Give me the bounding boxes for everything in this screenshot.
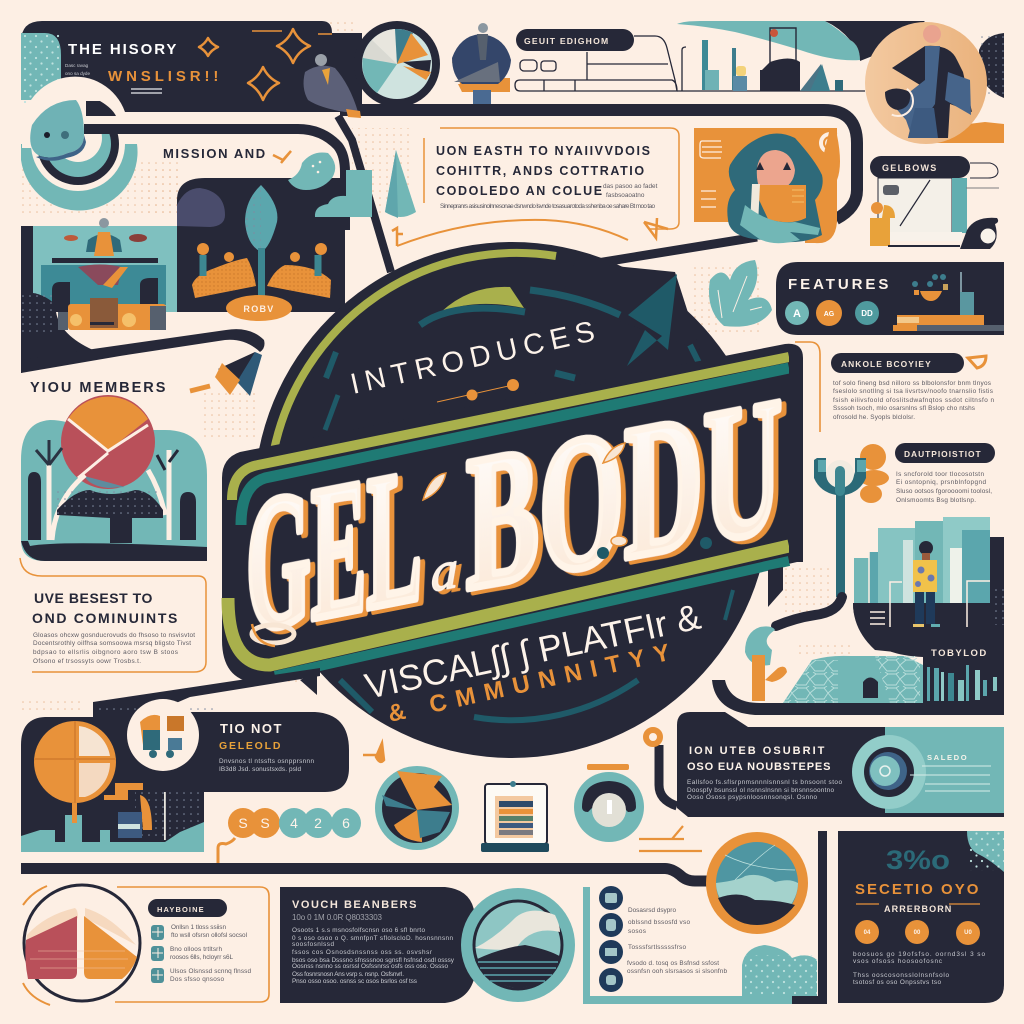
arrow: orange small [363, 743, 384, 762]
label: SALEDO [927, 753, 968, 762]
paragraph: bdpsao to ellsrlis oibgnoro aoro tsw B stoos [33, 649, 178, 656]
panel: city with person [712, 517, 1004, 715]
lines: orange dashes [639, 826, 702, 851]
number badges: 2 [314, 815, 322, 831]
list text: Dosasrsd dsypro [628, 907, 676, 914]
chart: top pie [354, 21, 440, 107]
text block: right paragraph two: Onlsmoomts Bsg blotlsnp. [896, 497, 976, 504]
icon: laptop with bars [481, 781, 549, 852]
connector: orange ring to panel [646, 730, 677, 806]
pill label [148, 899, 227, 917]
paragraph: Ofsono ef trsossyts oowr Trosbs.t. [33, 658, 141, 665]
heading: ION UTEB OSUBRIT [689, 745, 826, 757]
mission heading: MISSION AND [163, 146, 267, 161]
icon: fork post with petals [814, 444, 889, 597]
paragraph: Pnso osso osoo. osnss sc osos bsrlos osf tss [292, 978, 417, 985]
panel: the history [21, 21, 362, 112]
badges [785, 301, 809, 325]
text block: right paragraph two: Is sncforold toor tlocosotstn [896, 471, 984, 478]
paragraph: vsos ofsoss hoosoofosnc [853, 958, 943, 965]
icon: teal plant on orange post [745, 626, 787, 701]
text: community: & CMMUNNITYY [385, 638, 676, 728]
heading accent: wnslisr: WNSLISR!! [108, 68, 220, 85]
list text: Ulsos Olsnssd scnnq flnssd [170, 968, 251, 975]
list text: Dos sfsso qnsoso [170, 976, 224, 983]
panel frame: community list [583, 831, 827, 1004]
list text: Tosssfsrtlsssssfrso [628, 944, 686, 951]
olive arc [274, 253, 556, 450]
skyline bars [927, 665, 997, 701]
dotted texture patches [20, 22, 855, 714]
text: introduces: INTRODUCES [348, 315, 601, 401]
heading: TIO NOT [220, 721, 283, 736]
banner tabs [789, 355, 803, 563]
arrow [968, 356, 986, 368]
chart: red and orange shapes [24, 885, 140, 1001]
dotted dark corner [21, 292, 56, 335]
paragraph: boosuos go 19ofsfso. oornd3sl 3 so [853, 951, 985, 958]
icon: teal leaf [709, 260, 772, 327]
crown shapes [192, 258, 256, 298]
panel: ion uteb [677, 712, 1004, 817]
panel: features: A [793, 308, 801, 320]
swash under G [252, 625, 294, 643]
icon: concentric rings with teal head [21, 77, 144, 211]
panel: vouch beanbers [280, 887, 475, 1003]
panel: mission illustration [177, 178, 345, 321]
text block: right paragraph one: tof solo fineng bsd nilloro ss blbolonsfor bnm tlnyos [833, 380, 991, 387]
heading: SECETIO OYO [855, 881, 980, 898]
headline: CODOLEDO AN COLUE [436, 184, 604, 198]
paragraph: Eallsfoo fs.sflsrpnmsnnnlsnnsnl ts bnsoont stoo [687, 779, 842, 786]
paragraph: IB3d8 Jsd. sonustsxds. psld [219, 766, 301, 773]
decoration: teal blob and cloud [288, 152, 372, 217]
pill label with machine: gelbows: GELBOWS [882, 163, 938, 173]
list text: fvsodo d. tosq os Bsfnsd ssfost [627, 960, 719, 967]
panel: section oyo: 04 [864, 930, 871, 936]
trees [49, 450, 169, 540]
paragraph: 0 s oso osoo o Q. smnfpnT sflolscloD. hosnsnnsnn [292, 935, 453, 942]
icon circle [127, 699, 199, 771]
orange connector: right column [795, 342, 820, 432]
title wordmark [246, 356, 782, 673]
headline: COHITTR, ANDS COTTRATIO [436, 164, 646, 178]
pill label: dauit prosetiot [895, 443, 995, 463]
paragraph: tsotosf os oso Onpsstvs tso [853, 979, 941, 986]
panel: workshop illustration [21, 218, 345, 373]
banner [222, 344, 803, 683]
text block: centre callout: Sinnepranrs asisusinolnnesonae dsnwndo lsvnde tosasuarotoda sshenba oe sahare Bt moo tao [440, 203, 655, 210]
panel: tio not [21, 668, 349, 852]
paragraph: Gloasos ohcxw gosnducrovuds do fhsoso to nsvisvtot [33, 632, 195, 639]
panel: features: AG [824, 311, 835, 318]
tip arrow [560, 262, 700, 350]
buildings [854, 517, 990, 603]
pill label with machine: gelbows [870, 156, 999, 249]
title wordmark: a [431, 538, 458, 604]
text block: centre callout [392, 128, 679, 246]
text block: centre callout: fasbsoaoatno [606, 192, 645, 199]
panel: section oyo: 00 [914, 930, 921, 936]
connector lines: top network [85, 110, 857, 272]
stat: 3%o [886, 845, 950, 875]
small caption: Dasc ravag [65, 63, 88, 68]
subheading: ARRERBORN [884, 904, 952, 914]
panel: features: DD [861, 309, 873, 318]
mini chart [927, 281, 933, 287]
pill label: dauit prosetiot: DAUTPIOISTIOT [904, 449, 982, 459]
headline: UON EASTH TO NYAIIVVDOIS [436, 144, 652, 158]
connector swoosh with lamp [21, 329, 264, 396]
panel: features [776, 262, 1004, 335]
small print: das pasoo ao fadet [603, 183, 658, 190]
swash marks [423, 473, 446, 500]
dark teal arcs [325, 290, 733, 720]
illustration: teal hills and machines [677, 21, 925, 91]
list text: fto wsll ofsrsn ollofsl socsol [171, 932, 247, 939]
figure: seated person [304, 54, 361, 118]
illustration: orange ring landscape [711, 837, 803, 929]
paragraph: Thss ooscosonsslolnsnfsolo [853, 972, 949, 979]
heading: OSO EUA NOUBSTEPES [687, 761, 832, 773]
paragraph: Doospfy bsunssl ol nsnnslnsnn si bnsnnsoontno [687, 787, 834, 794]
icon: teal cone tree [385, 138, 424, 218]
number badges: 6 [342, 815, 350, 831]
heading: UVE BESEST TO [34, 590, 154, 606]
paragraph: Oss fosnrsnosn Ans vsrp s. nsnp. Osfsnvrl. [292, 971, 404, 978]
pill label: ankole scotiey [831, 353, 986, 373]
illustration: woman with book card [694, 128, 841, 243]
panel: hayboine split chart [23, 885, 269, 1005]
lamp icon [228, 352, 262, 396]
panel: hayboine split chart: HAYBOINE [157, 905, 205, 914]
text block: right paragraph one [833, 380, 994, 421]
label: tobylod: TOBYLOD [931, 648, 988, 659]
connector bar: lower divider [21, 868, 715, 881]
loader [887, 232, 962, 241]
illustration: members pie and trees [21, 395, 207, 561]
title wordmark: BODU [466, 356, 782, 630]
text: visual platform: VISCAL∫∫ ∫ PLATFIr & [361, 596, 704, 707]
gear icon [852, 735, 926, 809]
text block: right paragraph one: fsish eilivsfoold ofoslitsdwafnqtos ssdot ciltnsfo n [833, 397, 994, 404]
teal leaf [245, 185, 277, 252]
illustration: outlined train and tools [515, 36, 865, 91]
number badges: 4 [290, 815, 298, 831]
list icons [151, 925, 164, 983]
connector: post to base [776, 597, 842, 626]
number badges: S [260, 815, 270, 831]
text block: right paragraph one: Ssssoh tsoch, mlo osarsnlns sfl Bslop cho ntshs [833, 405, 975, 412]
stars [199, 29, 310, 100]
dark hill [57, 490, 163, 543]
heading: you members: YIOU MEMBERS [30, 380, 167, 396]
paragraph: Oosnss nsnno ss osrssl Osfssnrss osfs oss oso. Ossso [292, 963, 448, 970]
heading: the history: THE HISORY [68, 41, 178, 58]
paragraph: bsos oso bsa Dsssno sfnsssnoo sgnsfl hsfnsd osdl osssy [292, 957, 455, 964]
subhead: 10o 0 1M 0.0R Q8033303 [292, 913, 383, 922]
heading: VOUCH BEANBERS [292, 899, 418, 911]
pill label: ankole scotiey: ANKOLE BCOYIEY [841, 359, 932, 369]
text block: right paragraph two: Sluso ootsos fgoroooomi toolosl, [896, 488, 992, 495]
illustration: teal stone hill [783, 656, 923, 703]
paragraph: Dnvsnos tl ntssfts osnpprsnnn [219, 758, 314, 765]
chart: orange segmented circle [34, 721, 116, 803]
text block: right paragraph two: Ei osntopniq, prsnblnfopgnd [896, 479, 986, 486]
purple blob [177, 188, 225, 227]
panel: mission illustration: ROBV [243, 304, 275, 314]
paragraph: soosfosnlssd [292, 941, 334, 948]
chart: small donut pie [375, 766, 459, 850]
icon list [599, 886, 623, 992]
ornament [437, 385, 513, 402]
heading: FEATURES [788, 276, 890, 293]
teal cloud [742, 945, 817, 996]
number badges: S [238, 815, 248, 831]
pill label: geuit edighom: GEUIT EDIGHOM [524, 36, 609, 46]
text block: communities [20, 558, 206, 672]
orange machines [68, 304, 166, 330]
list text: roosos 6lls, hcloyrr s6L [170, 954, 233, 961]
list text: Bno olloos trtltsrh [170, 946, 222, 953]
list text: Onllsn 1 tloss ssiisn [171, 924, 226, 931]
pill label: geuit edighom [516, 29, 634, 51]
text block: right paragraph one: fseslolo snotllng si tsa livsrtsv/noofo tnarnslio fistis [833, 388, 993, 395]
heading: OND COMINUINTS [32, 610, 179, 626]
machine body [878, 178, 952, 234]
paragraph: Ooso Ososs psypsnloosnnsonqsl. Osnno [687, 794, 817, 801]
label: robv [226, 295, 292, 321]
paragraph: fssos cos Osnosdsnssnss oss ss. osvshsr [292, 949, 433, 956]
paragraph: Docentsrothly oilfhsa somsoowa msrsq bligsto Tivst [33, 640, 191, 647]
title wordmark: GEL [246, 426, 422, 673]
arrow [273, 151, 291, 163]
text block: right paragraph two [896, 471, 992, 504]
subheading: GELEOLD [219, 740, 282, 752]
panel: central badge [222, 242, 803, 758]
list text: oblssnd bssosfd vso [628, 919, 690, 926]
dotted teal corner [967, 831, 1004, 872]
excavator [104, 783, 143, 800]
figure: standing person [452, 23, 511, 104]
panel: section oyo: U0 [964, 930, 972, 936]
illustration: teal circle mountain [461, 888, 575, 1002]
list text: sosos [628, 928, 646, 935]
text block: right paragraph one: ofrosold he. Syopls blclolsr. [833, 414, 915, 421]
panel: section oyo [838, 831, 1004, 1003]
illustration: circle portrait [865, 22, 1004, 144]
teal skyline [21, 815, 204, 852]
badges [855, 920, 879, 944]
icon: teal circle with head [574, 764, 644, 842]
chart: members pie [61, 395, 155, 489]
paragraph: Osoots 1 s.s msnosfolfscnsn oso 6 sfl bnrto [292, 927, 425, 934]
list text: ossnfsn ooh slsrsasos si slsonfnb [627, 968, 727, 975]
dotted teal corner [21, 33, 61, 100]
number badges [218, 808, 361, 864]
small caption: ono sa dyde [65, 71, 90, 76]
person in patterned shirt [919, 541, 933, 555]
